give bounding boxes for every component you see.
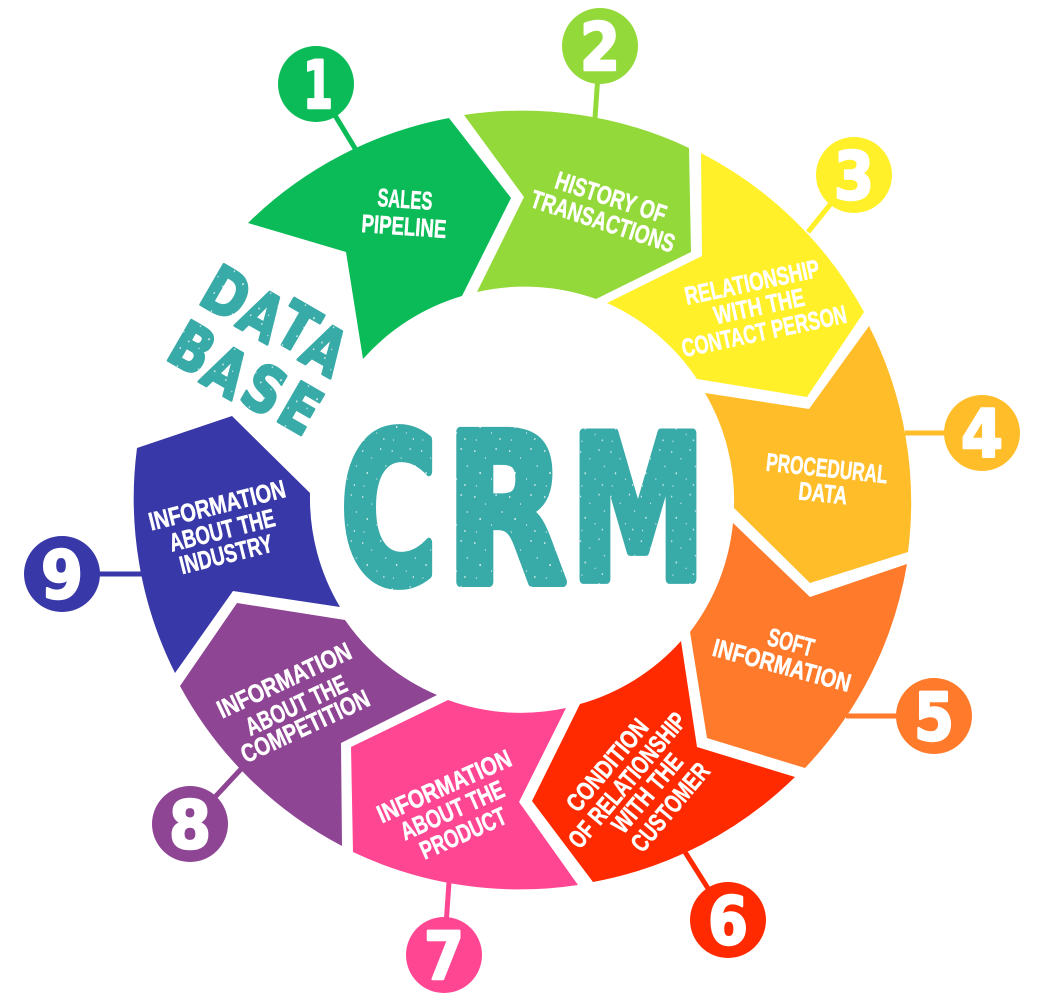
segment 2: history of transactions: TRANSACTIONS — [527, 185, 678, 258]
segment 7: information about the product: INFORMATION — [373, 745, 516, 829]
segment 5: soft information: INFORMATION — [710, 634, 854, 698]
segment 2: history of transactions: 2 — [580, 9, 620, 86]
segment 7: information about the product — [351, 700, 578, 995]
segment 4: procedural data: PROCEDURAL — [765, 449, 889, 489]
segment 5: soft information: SOFT — [764, 623, 817, 663]
segment 8: information about the competition: INFORMATION — [213, 638, 356, 724]
segment 2: history of transactions — [464, 8, 691, 299]
segment 2: history of transactions: HISTORY OF — [552, 167, 670, 229]
segment 9: information about the industry — [24, 416, 340, 673]
segment 6: condition of relationship with the customer: OF RELATIONSHIP — [563, 707, 692, 854]
segment 8: information about the competition: COMPETITION — [237, 685, 374, 769]
heading: data base: D — [188, 251, 263, 337]
segment 8: information about the competition: ABOUT THE — [241, 670, 352, 742]
segment 6: condition of relationship with the customer: CONDITION — [561, 714, 654, 818]
segment 1: sales pipeline: 1 — [303, 47, 333, 124]
segment 3: relationship with the contact person: CONTACT PERSON — [679, 301, 849, 363]
heading: data base: T — [263, 287, 331, 369]
segment 4: procedural data — [705, 326, 1020, 583]
segment 5: soft information: 5 — [914, 679, 954, 756]
title: CRM: M — [570, 394, 706, 627]
title: CRM: C — [341, 390, 437, 631]
segment 6: condition of relationship with the customer: WITH THE — [607, 748, 689, 839]
segment 4: procedural data: DATA — [797, 478, 849, 510]
segment 1: sales pipeline: PIPELINE — [361, 210, 447, 244]
heading: data base: A — [190, 330, 262, 414]
title: CRM: R — [446, 392, 566, 632]
heading: data base: A — [289, 308, 361, 392]
segment 9: information about the industry: 9 — [41, 537, 83, 614]
segment 7: information about the product: PRODUCT — [416, 802, 511, 865]
heading: data base: S — [229, 348, 299, 432]
heading: data base: A — [226, 274, 298, 358]
segment 4: procedural data: 4 — [961, 396, 1003, 473]
segment 6: condition of relationship with the customer: 6 — [708, 883, 748, 960]
segment 3: relationship with the contact person: RELATIONSHIP — [682, 255, 822, 311]
segment 9: information about the industry: INDUSTRY — [177, 530, 276, 580]
segment 7: information about the product: ABOUT THE — [396, 776, 509, 846]
segment 3: relationship with the contact person — [607, 137, 892, 397]
heading: data base: B — [156, 307, 228, 391]
heading: data base — [156, 251, 361, 450]
segment 5: soft information — [690, 523, 972, 768]
segment 8: information about the competition — [152, 603, 437, 864]
segment 8: information about the competition: 8 — [169, 787, 211, 864]
segment 7: information about the product: 7 — [424, 918, 464, 995]
segment 6: condition of relationship with the customer — [532, 641, 795, 960]
segment 6: condition of relationship with the customer: CUSTOMER — [626, 758, 716, 858]
segment 1: sales pipeline — [248, 46, 511, 359]
segment 3: relationship with the contact person: WITH THE — [711, 284, 807, 330]
title: CRM — [341, 390, 706, 632]
segment 1: sales pipeline: SALES — [377, 184, 433, 216]
segment 3: relationship with the contact person: 3 — [834, 138, 874, 215]
segment 9: information about the industry: INFORMATION — [146, 475, 289, 536]
segment 9: information about the industry: ABOUT THE — [166, 504, 278, 558]
heading: data base: E — [266, 368, 334, 450]
